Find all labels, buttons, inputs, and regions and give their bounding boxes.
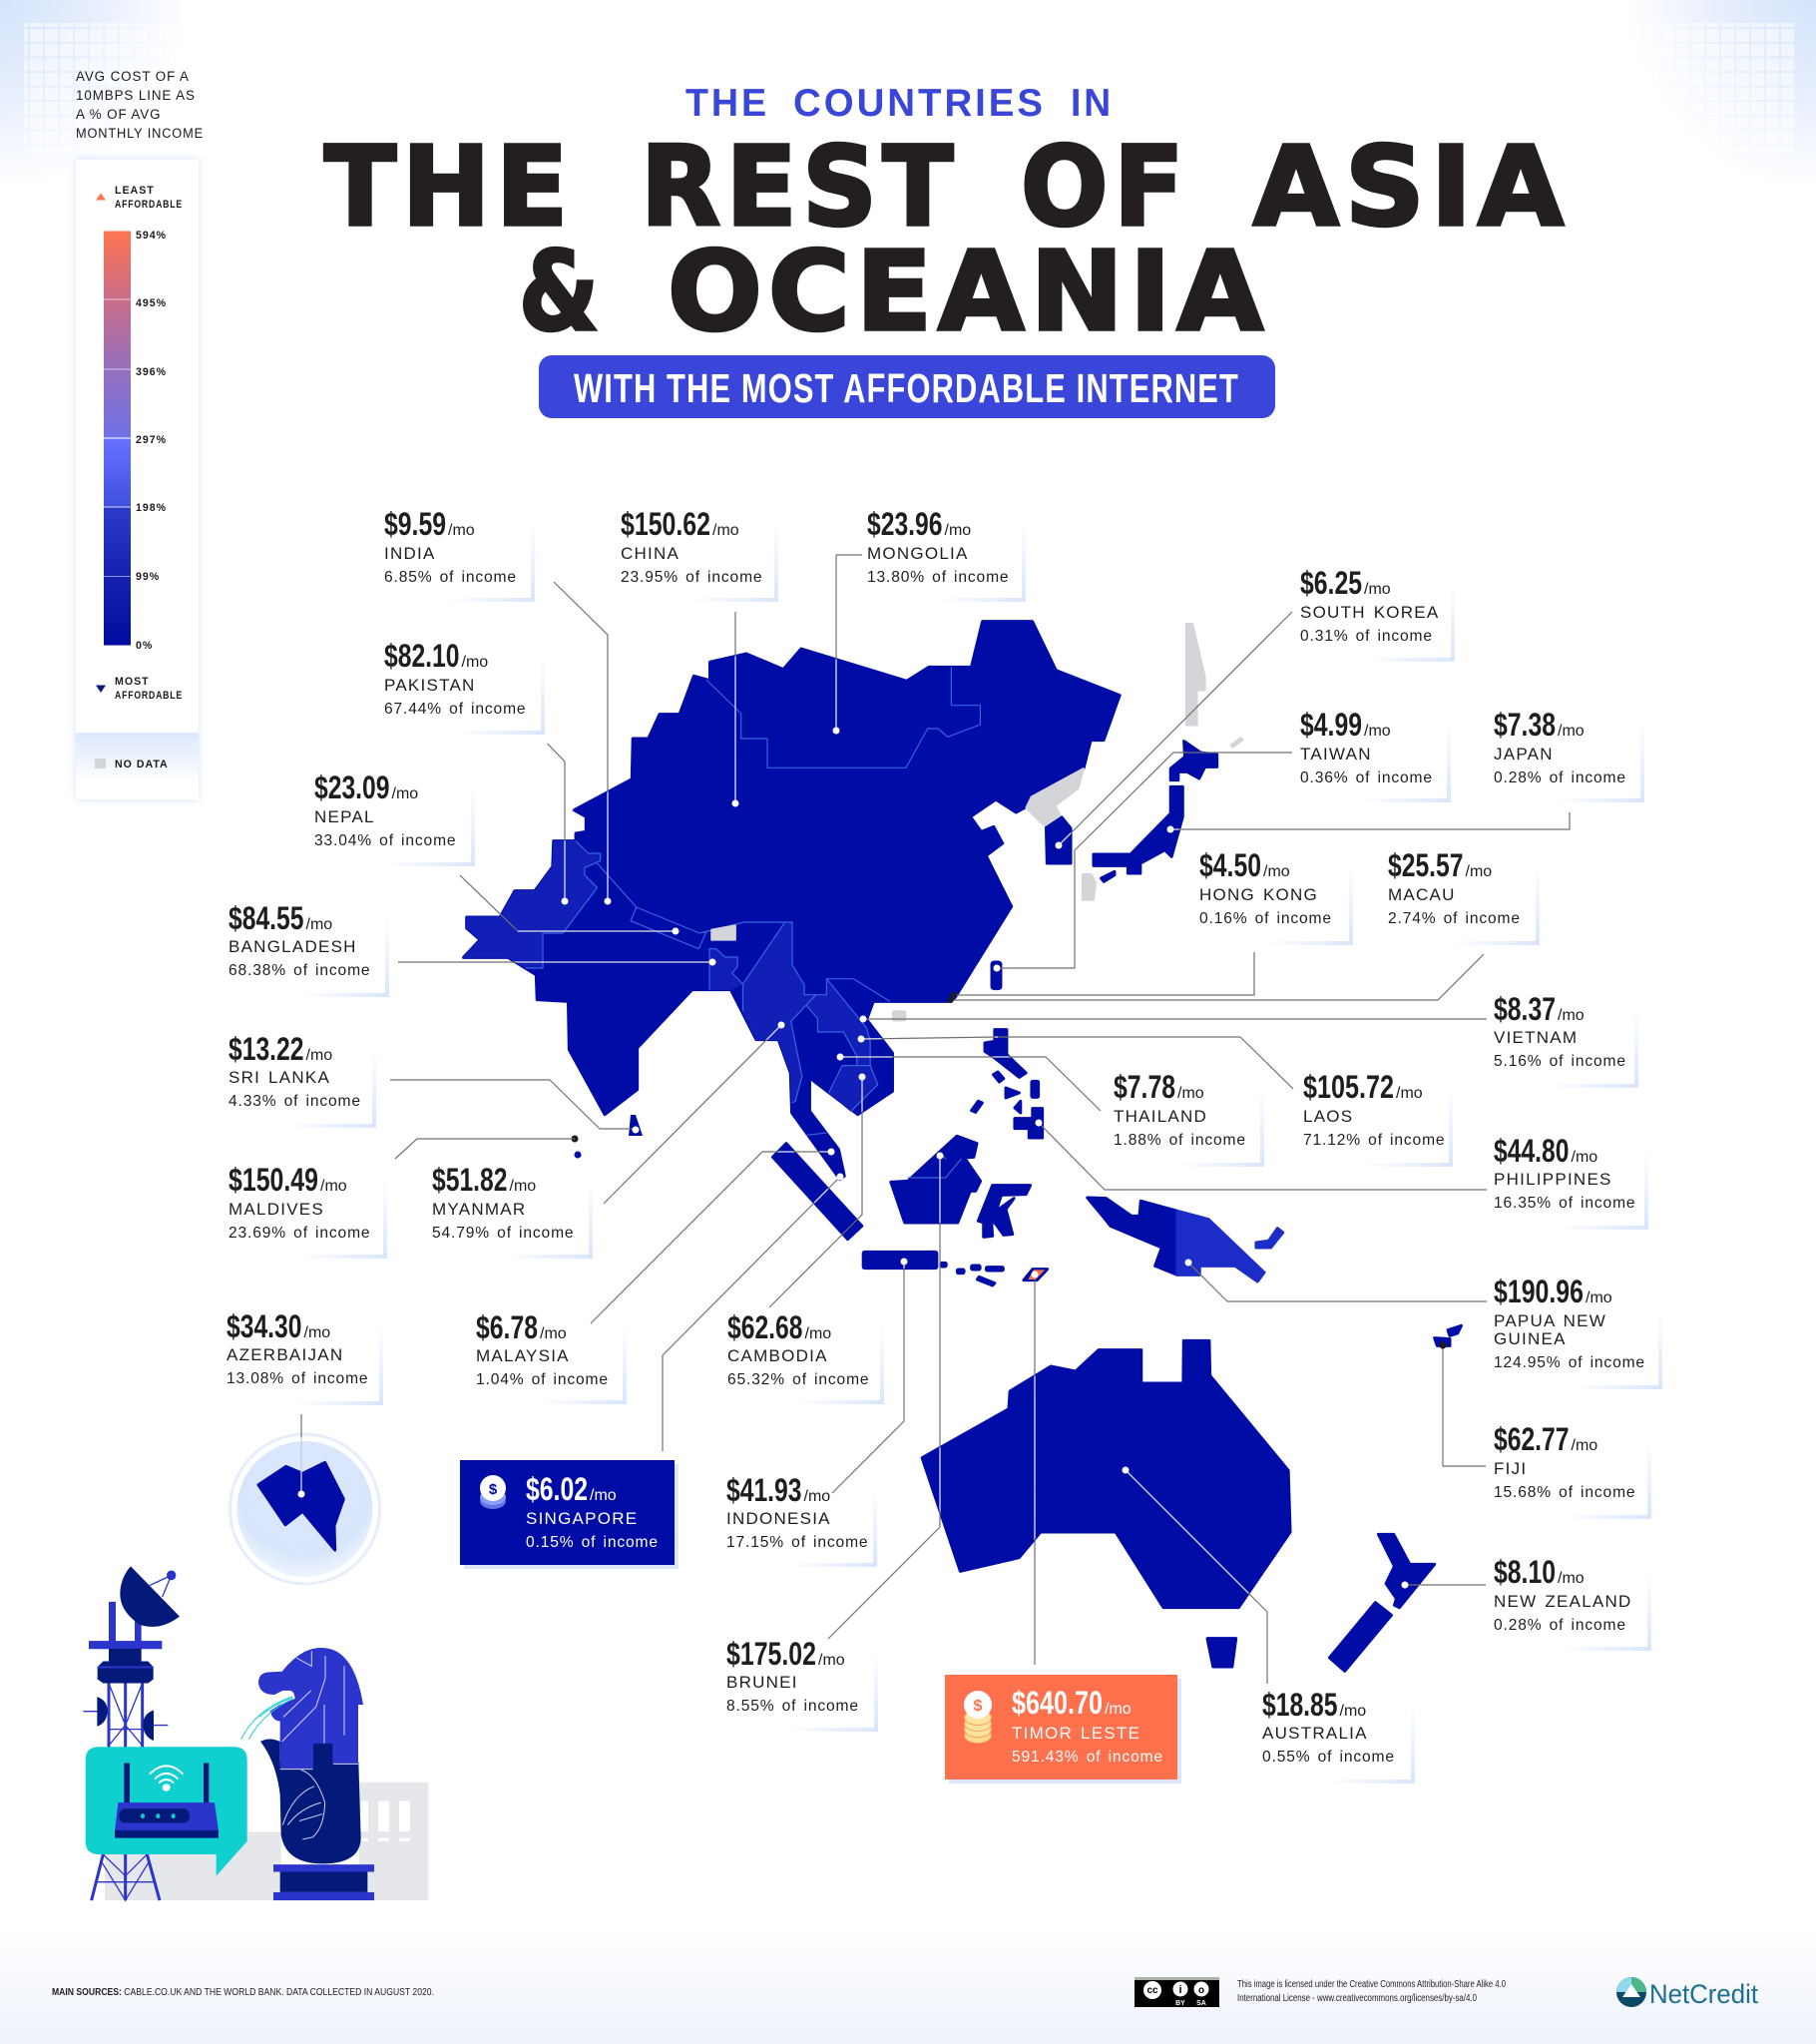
footer sources: MAIN SOURCES: CABLE.CO.UK AND THE WORLD BANK. DATA COLLECTED IN AUGUST 2020. bbox=[52, 1986, 434, 1998]
card: Taiwan: TAIWAN bbox=[1300, 745, 1372, 764]
card: China: $150.62 bbox=[621, 506, 710, 542]
country borders bbox=[526, 667, 980, 1111]
Azerbaijan inset bbox=[229, 1434, 379, 1584]
most affordable label: MOST bbox=[115, 676, 150, 688]
speech bubble bbox=[86, 1747, 247, 1876]
scale labels: 396% bbox=[136, 366, 167, 378]
card: Papua New Guinea bbox=[1494, 1274, 1662, 1389]
legend heading: A % OF AVG bbox=[76, 107, 161, 122]
card: China: CHINA bbox=[621, 544, 680, 563]
card: Hong Kong bbox=[1199, 847, 1353, 945]
highlight card: Timor Leste: TIMOR LESTE bbox=[1012, 1724, 1140, 1743]
no data: Sakhalin and islands bbox=[1083, 624, 1243, 900]
main title: OF bbox=[1021, 123, 1189, 251]
card: Cambodia bbox=[727, 1309, 884, 1404]
card: Fiji: FIJI bbox=[1494, 1459, 1527, 1478]
card: Hong Kong: /mo bbox=[1263, 863, 1290, 880]
icon: coin stack bbox=[964, 1691, 992, 1743]
card: Laos: LAOS bbox=[1303, 1107, 1353, 1126]
skyline backdrop bbox=[105, 1783, 428, 1900]
card: Nepal: 33.04% of income bbox=[314, 832, 456, 849]
highlight card: Singapore: /mo bbox=[590, 1487, 617, 1504]
card: Hong Kong: $4.50 bbox=[1199, 847, 1261, 883]
card: Indonesia: 17.15% of income bbox=[726, 1534, 868, 1551]
map: Oceania bbox=[922, 1325, 1461, 1671]
card: Malaysia: $6.78 bbox=[476, 1309, 538, 1345]
no data: Bhutan bbox=[711, 925, 735, 940]
leader lines bbox=[301, 555, 1570, 1684]
Philippines bbox=[972, 1030, 1043, 1138]
licence text bbox=[1237, 1979, 1506, 2004]
card: Maldives: MALDIVES bbox=[228, 1200, 324, 1219]
main title: OCEANIA bbox=[668, 228, 1269, 355]
licence text: International License - www.creativecommons.org/licenses/by-sa/4.0 bbox=[1237, 1993, 1477, 2004]
card: Japan: JAPAN bbox=[1494, 745, 1554, 764]
card: Pakistan bbox=[384, 638, 545, 735]
title kicker: IN bbox=[1071, 82, 1114, 125]
scale labels: 297% bbox=[136, 434, 167, 446]
card: South Korea: SOUTH KOREA bbox=[1300, 603, 1439, 622]
card: Macau: $25.57 bbox=[1388, 847, 1463, 883]
card: Myanmar: MYANMAR bbox=[432, 1200, 526, 1219]
card: Taiwan: $4.99 bbox=[1300, 707, 1362, 743]
legend panel bbox=[76, 160, 199, 799]
creative commons badge: i bbox=[1178, 1984, 1182, 1996]
highlight card: Timor Leste bbox=[945, 1675, 1181, 1784]
card: Taiwan bbox=[1300, 707, 1451, 802]
card: Japan: /mo bbox=[1558, 723, 1585, 740]
card: Sri Lanka: 4.33% of income bbox=[228, 1093, 361, 1110]
card: Brunei: $175.02 bbox=[726, 1636, 816, 1672]
card: Fiji: 15.68% of income bbox=[1494, 1484, 1635, 1501]
card: New Zealand bbox=[1494, 1554, 1651, 1651]
licence text: This image is licensed under the Creative Commons Attribution-Share Alike 4.0 bbox=[1237, 1979, 1506, 1990]
card: Philippines: 16.35% of income bbox=[1494, 1195, 1635, 1212]
card: Pakistan: /mo bbox=[461, 654, 488, 671]
Hong Kong and Macau dots bbox=[948, 992, 956, 1003]
card: Maldives bbox=[228, 1162, 387, 1259]
card: Myanmar: /mo bbox=[509, 1178, 536, 1195]
card: Philippines bbox=[1494, 1133, 1648, 1230]
router with wifi bbox=[115, 1764, 219, 1838]
card: Azerbaijan: AZERBAIJAN bbox=[227, 1345, 343, 1364]
title kicker: THE bbox=[685, 82, 769, 125]
card: Sri Lanka: SRI LANKA bbox=[228, 1068, 330, 1087]
card: Maldives: /mo bbox=[320, 1178, 347, 1195]
card: Australia: AUSTRALIA bbox=[1262, 1724, 1368, 1743]
card: Taiwan: /mo bbox=[1364, 723, 1391, 740]
card: Philippines: /mo bbox=[1571, 1149, 1597, 1166]
card: Laos bbox=[1303, 1069, 1453, 1167]
card: Macau: 2.74% of income bbox=[1388, 910, 1521, 927]
card: Macau: MACAU bbox=[1388, 885, 1456, 904]
Australia bbox=[922, 1340, 1290, 1608]
card: Pakistan: 67.44% of income bbox=[384, 701, 526, 718]
card: China: /mo bbox=[712, 522, 739, 539]
Sumatra bbox=[773, 1144, 862, 1240]
card: Thailand: $7.78 bbox=[1114, 1069, 1175, 1105]
card: Brunei: BRUNEI bbox=[726, 1673, 798, 1692]
card: Mongolia: /mo bbox=[944, 522, 971, 539]
main title: & bbox=[519, 228, 604, 355]
map: maritime South-East Asia bbox=[773, 1030, 1283, 1285]
card: Malaysia: MALAYSIA bbox=[476, 1346, 570, 1365]
side dishes bbox=[97, 1697, 108, 1727]
Cambodia bbox=[829, 1066, 878, 1111]
card: Vietnam: $8.37 bbox=[1494, 991, 1556, 1027]
card: Vietnam: /mo bbox=[1558, 1007, 1585, 1024]
card: Nepal: NEPAL bbox=[314, 807, 375, 826]
card: Thailand bbox=[1114, 1069, 1264, 1167]
card: Thailand: 1.88% of income bbox=[1114, 1132, 1246, 1149]
subtitle banner bbox=[539, 355, 1275, 418]
card: Bangladesh: 68.38% of income bbox=[228, 962, 370, 979]
scale labels: 495% bbox=[136, 297, 167, 309]
card: Maldives: $150.49 bbox=[228, 1162, 318, 1198]
card: Bangladesh: /mo bbox=[305, 916, 332, 933]
legend heading: MONTHLY INCOME bbox=[76, 126, 204, 141]
card: Brunei bbox=[726, 1636, 878, 1732]
most affordable label bbox=[115, 676, 183, 702]
map: Japan and neighbours bbox=[1083, 624, 1243, 900]
card: Cambodia: CAMBODIA bbox=[727, 1346, 828, 1365]
card: New Zealand: $8.10 bbox=[1494, 1554, 1556, 1590]
most affordable label: AFFORDABLE bbox=[115, 690, 183, 702]
icon: least affordable triangle bbox=[96, 194, 106, 200]
Papua New Guinea bbox=[1177, 1211, 1283, 1281]
card: Azerbaijan: $34.30 bbox=[227, 1308, 301, 1344]
scale labels: 0% bbox=[136, 640, 153, 652]
card: Fiji: /mo bbox=[1571, 1437, 1597, 1454]
card: Papua New Guinea: PAPUA NEW bbox=[1494, 1311, 1606, 1330]
card: Malaysia: /mo bbox=[540, 1325, 567, 1342]
main title bbox=[324, 123, 1570, 355]
map: Asia mainland bbox=[464, 622, 1120, 1180]
card: Japan: $7.38 bbox=[1494, 707, 1556, 743]
card: Mongolia bbox=[867, 506, 1026, 602]
map: Maldives bbox=[571, 1136, 581, 1158]
map: Sri Lanka bbox=[629, 1115, 643, 1136]
small Indonesian islands bbox=[941, 1263, 1003, 1285]
card: Indonesia bbox=[726, 1472, 877, 1567]
card: Vietnam: VIETNAM bbox=[1494, 1028, 1578, 1047]
card: Australia: /mo bbox=[1339, 1703, 1366, 1720]
creative commons badge: BY bbox=[1175, 2000, 1185, 2007]
card: Philippines: PHILIPPINES bbox=[1494, 1170, 1612, 1189]
card: Thailand: /mo bbox=[1177, 1085, 1204, 1102]
card: Cambodia: /mo bbox=[804, 1325, 831, 1342]
card: Maldives: 23.69% of income bbox=[228, 1225, 370, 1242]
creative commons badge bbox=[1135, 1977, 1219, 2007]
no data: North Korea bbox=[1026, 768, 1084, 827]
card: South Korea: 0.31% of income bbox=[1300, 628, 1433, 645]
leader lines over land bbox=[515, 656, 1249, 1594]
New Guinea, Indonesia bbox=[1088, 1198, 1177, 1275]
no data: Hainan bbox=[893, 1011, 905, 1020]
card: India: INDIA bbox=[384, 544, 436, 563]
card: Papua New Guinea: 124.95% of income bbox=[1494, 1354, 1645, 1371]
card: South Korea: $6.25 bbox=[1300, 565, 1362, 601]
New Zealand bbox=[1329, 1534, 1435, 1671]
least affordable label bbox=[115, 185, 183, 211]
icon: most affordable triangle bbox=[96, 685, 106, 693]
card: Nepal: $23.09 bbox=[314, 769, 389, 805]
no data key: NO DATA bbox=[115, 759, 169, 770]
pedestal bbox=[273, 1864, 374, 1872]
card: Brunei: /mo bbox=[818, 1652, 845, 1669]
card: Sri Lanka bbox=[228, 1031, 376, 1128]
card: Bangladesh: $84.55 bbox=[228, 900, 303, 936]
scale labels: 594% bbox=[136, 230, 167, 242]
card: Nepal: /mo bbox=[391, 785, 418, 802]
card: Cambodia: 65.32% of income bbox=[727, 1371, 869, 1388]
card: New Zealand: /mo bbox=[1558, 1570, 1585, 1587]
card: Myanmar: $51.82 bbox=[432, 1162, 507, 1198]
icon: coin: $ bbox=[489, 1481, 498, 1498]
card: Azerbaijan: /mo bbox=[303, 1324, 330, 1341]
card: Sri Lanka: $13.22 bbox=[228, 1031, 303, 1067]
highlight card: Singapore: SINGAPORE bbox=[526, 1509, 638, 1528]
card: Mongolia: $23.96 bbox=[867, 506, 942, 542]
scale labels: 198% bbox=[136, 502, 167, 514]
highlight card: Singapore: 0.15% of income bbox=[526, 1534, 659, 1551]
card: Indonesia: INDONESIA bbox=[726, 1509, 831, 1528]
card: Laos: $105.72 bbox=[1303, 1069, 1394, 1105]
azerbaijan leader over land bbox=[300, 1437, 302, 1494]
card: Mongolia: MONGOLIA bbox=[867, 544, 969, 563]
NetCredit logo bbox=[1616, 1977, 1758, 2009]
card: Taiwan: 0.36% of income bbox=[1300, 769, 1433, 786]
card: New Zealand: 0.28% of income bbox=[1494, 1617, 1626, 1634]
scale labels bbox=[136, 230, 167, 652]
least affordable label: LEAST bbox=[115, 185, 155, 197]
highlight card: Timor Leste: $640.70 bbox=[1012, 1685, 1103, 1721]
Borneo bbox=[891, 1136, 981, 1223]
highlight card: Timor Leste: /mo bbox=[1105, 1701, 1132, 1718]
card: Thailand: THAILAND bbox=[1114, 1107, 1207, 1126]
card: Vietnam: 5.16% of income bbox=[1494, 1053, 1626, 1070]
card: Australia: 0.55% of income bbox=[1262, 1749, 1395, 1766]
Laos bbox=[806, 979, 870, 1066]
main title: REST bbox=[641, 123, 959, 251]
Malaysia border bbox=[806, 1133, 827, 1135]
legend heading bbox=[76, 69, 204, 141]
card: Pakistan: $82.10 bbox=[384, 638, 459, 674]
colour scale bar bbox=[104, 232, 131, 645]
Sulawesi bbox=[978, 1186, 1031, 1237]
card: India: /mo bbox=[448, 522, 475, 539]
highlight card: Singapore: $6.02 bbox=[526, 1471, 588, 1507]
card: Azerbaijan bbox=[227, 1308, 383, 1405]
card: Macau bbox=[1388, 847, 1540, 945]
South Korea bbox=[1046, 817, 1071, 863]
card: Indonesia: $41.93 bbox=[726, 1472, 802, 1508]
card: Laos: /mo bbox=[1396, 1085, 1423, 1102]
Taiwan bbox=[992, 962, 1001, 989]
card: Azerbaijan: 13.08% of income bbox=[227, 1370, 368, 1387]
card: Bangladesh: BANGLADESH bbox=[228, 937, 357, 956]
Bangladesh bbox=[709, 949, 742, 990]
title kicker bbox=[685, 82, 1114, 125]
card: Bangladesh bbox=[228, 900, 389, 997]
card: Philippines: $44.80 bbox=[1494, 1133, 1569, 1169]
card: India bbox=[384, 506, 535, 602]
card: Australia: $18.85 bbox=[1262, 1687, 1337, 1723]
Java bbox=[863, 1252, 937, 1269]
card: Nepal bbox=[314, 769, 475, 866]
card: India: $9.59 bbox=[384, 506, 446, 542]
card: Papua New Guinea: $190.96 bbox=[1494, 1274, 1584, 1309]
card: Cambodia: $62.68 bbox=[727, 1309, 802, 1345]
highlight card: Singapore bbox=[460, 1460, 679, 1569]
card: Myanmar bbox=[432, 1162, 593, 1259]
location dots bbox=[297, 727, 1447, 1589]
main title: ASIA bbox=[1253, 123, 1570, 251]
illustration: skyline, tower, router and merlion bbox=[83, 1566, 428, 1900]
card: Pakistan: PAKISTAN bbox=[384, 676, 476, 695]
card: Indonesia: /mo bbox=[804, 1488, 830, 1505]
card: India: 6.85% of income bbox=[384, 569, 517, 586]
card: Australia bbox=[1262, 1687, 1415, 1784]
card: Sri Lanka: /mo bbox=[305, 1047, 332, 1064]
title kicker: COUNTRIES bbox=[793, 82, 1046, 125]
card: Malaysia: 1.04% of income bbox=[476, 1371, 609, 1388]
card: Japan bbox=[1494, 707, 1644, 802]
Tasmania bbox=[1207, 1639, 1236, 1667]
card: Fiji bbox=[1494, 1421, 1651, 1519]
main title: THE bbox=[324, 123, 574, 251]
legend heading: AVG COST OF A bbox=[76, 69, 190, 84]
creative commons badge: SA bbox=[1196, 2000, 1206, 2007]
card: Myanmar: 54.79% of income bbox=[432, 1225, 574, 1242]
card: China bbox=[621, 506, 778, 602]
card: Japan: 0.28% of income bbox=[1494, 769, 1626, 786]
card: South Korea bbox=[1300, 565, 1455, 662]
card: South Korea: /mo bbox=[1364, 581, 1391, 598]
communications tower bbox=[83, 1566, 180, 1900]
creative commons badge: cc bbox=[1146, 1985, 1158, 1996]
merlion statue bbox=[241, 1648, 374, 1900]
card: Vietnam bbox=[1494, 991, 1638, 1088]
highlight card: Timor Leste: 591.43% of income bbox=[1012, 1749, 1163, 1766]
least affordable label: AFFORDABLE bbox=[115, 199, 183, 211]
subtitle banner: WITH THE MOST AFFORDABLE INTERNET bbox=[574, 365, 1239, 411]
Pakistan bbox=[464, 841, 601, 968]
card: Laos: 71.12% of income bbox=[1303, 1132, 1445, 1149]
card: Macau: /mo bbox=[1465, 863, 1492, 880]
NetCredit logo: NetCredit bbox=[1649, 1979, 1758, 2009]
card: Malaysia bbox=[476, 1309, 627, 1404]
card: Hong Kong: 0.16% of income bbox=[1199, 910, 1332, 927]
card: Mongolia: 13.80% of income bbox=[867, 569, 1009, 586]
Timor Leste bbox=[1024, 1270, 1048, 1280]
card: Brunei: 8.55% of income bbox=[726, 1698, 859, 1715]
card: Papua New Guinea: /mo bbox=[1586, 1289, 1612, 1306]
satellite dish bbox=[120, 1566, 180, 1627]
scale labels: 99% bbox=[136, 571, 160, 583]
card: Papua New Guinea: GUINEA bbox=[1494, 1329, 1567, 1348]
card: New Zealand: NEW ZEALAND bbox=[1494, 1592, 1632, 1611]
legend heading: 10MBPS LINE AS bbox=[76, 88, 196, 103]
Fiji bbox=[1435, 1325, 1461, 1345]
icon: coin stack: $ bbox=[974, 1698, 983, 1715]
creative commons badge: o bbox=[1198, 1985, 1204, 1996]
card: China: 23.95% of income bbox=[621, 569, 762, 586]
Myanmar bbox=[742, 923, 815, 1103]
card: Hong Kong: HONG KONG bbox=[1199, 885, 1318, 904]
card: Fiji: $62.77 bbox=[1494, 1421, 1569, 1457]
icon: coin bbox=[480, 1475, 506, 1509]
